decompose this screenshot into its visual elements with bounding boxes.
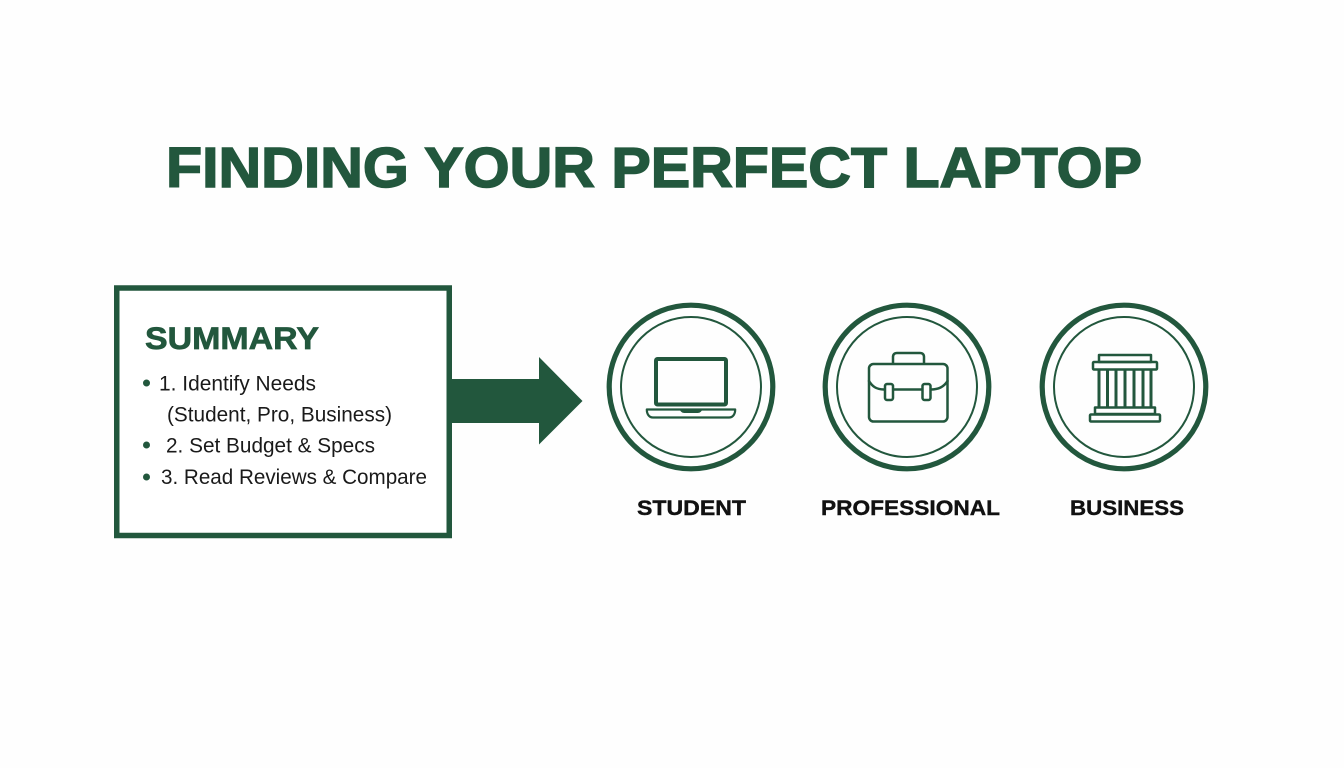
title: FINDING YOUR PERFECT LAPTOP <box>166 136 1142 200</box>
icon: columned building <box>1090 355 1160 422</box>
summary list <box>143 372 427 489</box>
list item 1: (Student, Pro, Business) <box>167 402 392 426</box>
panel: student <box>609 305 773 520</box>
summary box frame <box>117 288 449 536</box>
panel: business <box>1042 305 1206 520</box>
list item 1: 1. Identify Needs <box>159 372 316 396</box>
list item 2: 2. Set Budget & Specs <box>166 434 375 458</box>
list item 1 <box>143 372 392 426</box>
icon: laptop <box>647 359 735 418</box>
badge rings <box>1042 305 1206 469</box>
label: professional: PROFESSIONAL <box>821 496 1000 520</box>
icon: briefcase <box>869 353 948 422</box>
list item 3: 3. Read Reviews & Compare <box>161 465 427 489</box>
panel: summary <box>117 288 449 536</box>
badge rings <box>825 305 989 469</box>
arrow <box>451 357 582 444</box>
summary heading: SUMMARY <box>145 320 319 356</box>
label: student: STUDENT <box>637 496 746 520</box>
label: business: BUSINESS <box>1070 496 1184 520</box>
badge rings <box>609 305 773 469</box>
panel: professional <box>821 305 1000 520</box>
